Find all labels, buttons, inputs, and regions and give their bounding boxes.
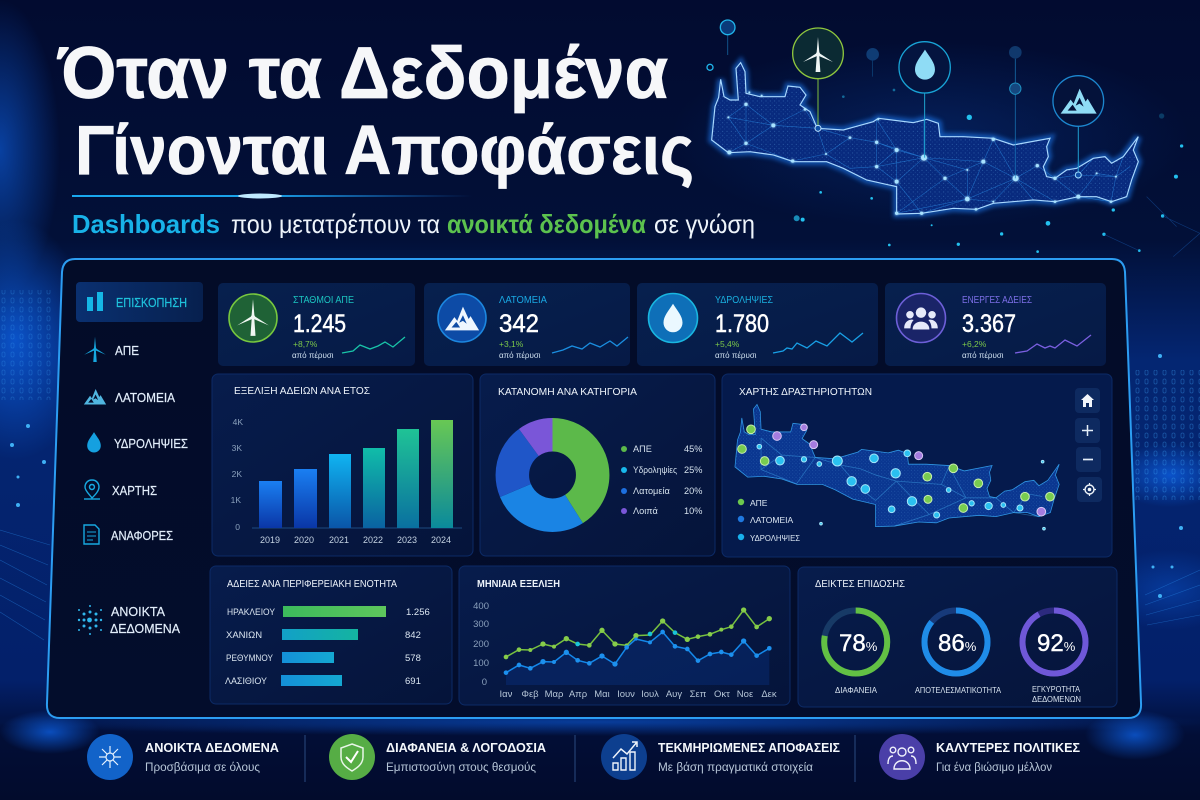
nav: quarries: ΛΑΤΟΜΕΙΑ (115, 391, 176, 405)
mini map of crete (735, 404, 1059, 527)
subtitle: σε γνώση (654, 209, 755, 239)
map legend (738, 498, 800, 543)
open data logo: ΔΕΔΟΜΕΝΑ (110, 621, 180, 636)
KPI card: water abstractions: ΥΔΡΟΛΗΨΙΕΣ (715, 294, 773, 306)
donut chart (512, 435, 593, 515)
donut legend: 45% (684, 444, 702, 454)
panel: activity map (722, 374, 1112, 557)
x axis: 2024 (431, 535, 451, 545)
KPI card: active permits: 3.367 (962, 310, 1016, 338)
map controls (1075, 388, 1102, 502)
benefit: better policies: Για ένα βιώσιμο μέλλον (936, 762, 1052, 774)
y axis: 1K (231, 495, 241, 505)
benefit: open data (87, 734, 279, 780)
gauge: transparency (824, 610, 887, 695)
subtitle: ανοικτά δεδομένα (447, 209, 646, 239)
month labels: Ιουν (617, 689, 635, 700)
map legend: ΛΑΤΟΜΕΙΑ (750, 515, 793, 525)
panel: monthly trend line chart (459, 566, 790, 705)
x axis (260, 535, 451, 545)
panel: performance indicators: ΔΕΙΚΤΕΣ ΕΠΙΔΟΣΗΣ (815, 578, 905, 590)
map markers (738, 424, 1054, 530)
title (57, 33, 694, 189)
horizontal bars: ΛΑΣΙΘΙΟΥ (225, 676, 268, 687)
panel: permits by regional unit (210, 566, 452, 704)
donut legend (621, 444, 702, 516)
horizontal bars (225, 606, 430, 687)
benefit: evidence-based decisions (601, 734, 840, 780)
month labels: Φεβ (521, 689, 539, 700)
KPI card: quarries (424, 283, 630, 366)
gauge: data validity (1022, 610, 1086, 704)
gauge: transparency: 78% (839, 630, 878, 657)
panel: category donut (480, 374, 715, 556)
line series (504, 607, 772, 685)
KPI card: quarries: 342 (499, 310, 539, 338)
month labels: Οκτ (714, 689, 730, 700)
title: Γίνονται Αποφάσεις (75, 111, 694, 189)
panel: permits by regional unit: ΑΔΕΙΕΣ ΑΝΑ ΠΕΡΙΦΕΡΕΙΑΚΗ ΕΝΟΤΗΤΑ (227, 578, 397, 590)
panel: permits by year bar chart: ΕΞΕΛΙΞΗ ΑΔΕΙΩΝ ΑΝΑ ΕΤΟΣ (234, 385, 370, 397)
nav: map (84, 480, 157, 499)
month labels: Δεκ (761, 689, 777, 700)
KPI card: RES stations: ΣΤΑΘΜΟΙ ΑΠΕ (293, 294, 354, 306)
nav: overview active (76, 282, 203, 322)
subtitle (72, 209, 755, 239)
month labels (500, 689, 777, 700)
subtitle: που μετατρέπουν τα (231, 209, 440, 239)
benefit: open data: Προσβάσιμα σε όλους (145, 762, 260, 774)
horizontal bars: 578 (405, 653, 421, 664)
month labels: Απρ (569, 689, 588, 700)
nav: water abstractions: ΥΔΡΟΛΗΨΙΕΣ (114, 437, 188, 451)
bars (259, 420, 453, 528)
crete network map with pins (707, 20, 1200, 257)
gauge: data validity: ΕΓΚΥΡΟΤΗΤΑ (1032, 684, 1080, 694)
x axis: 2022 (363, 535, 383, 545)
x axis: 2023 (397, 535, 417, 545)
KPI card: water abstractions (637, 283, 878, 366)
KPI card: active permits: +6,2% (962, 339, 987, 349)
month labels: Αυγ (666, 689, 682, 700)
nav: res (84, 337, 139, 362)
y axis (231, 417, 243, 532)
x axis: 2019 (260, 535, 280, 545)
horizontal bars: ΡΕΘΥΜΝΟΥ (226, 653, 274, 664)
donut legend: 25% (684, 465, 702, 475)
gauge: effectiveness (915, 610, 1001, 695)
horizontal bars: ΧΑΝΙΩΝ (226, 630, 262, 641)
horizontal bars: 691 (405, 676, 421, 687)
gauge: data validity: ΔΕΔΟΜΕΝΩΝ (1032, 694, 1081, 704)
icon: people (896, 294, 946, 342)
KPI card: quarries: +3,1% (499, 339, 524, 349)
sidebar navigation (76, 282, 203, 636)
KPI card: water abstractions: 1.780 (715, 310, 769, 338)
title: Όταν τα Δεδομένα (57, 33, 668, 114)
month labels: Ιαν (500, 689, 513, 700)
map legend: ΑΠΕ (750, 498, 768, 508)
benefit: better policies: ΚΑΛΥΤΕΡΕΣ ΠΟΛΙΤΙΚΕΣ (936, 741, 1080, 755)
nav: reports: ΑΝΑΦΟΡΕΣ (111, 529, 173, 543)
KPI card: RES stations: από πέρυσι (292, 351, 334, 360)
month labels: Σεπ (690, 689, 707, 700)
pin: water drop (899, 42, 950, 158)
benefit: transparency: Εμπιστοσύνη στους θεσμούς (386, 762, 536, 774)
KPI card: active permits (885, 283, 1106, 366)
nav: reports (84, 525, 173, 544)
map legend: ΥΔΡΟΛΗΨΙΕΣ (750, 533, 800, 543)
axis labels: 200 (473, 639, 489, 650)
KPI card: quarries: ΛΑΤΟΜΕΙΑ (499, 294, 547, 306)
nav: overview active: ΕΠΙΣΚΟΠΗΣΗ (116, 296, 187, 310)
dashboard frame (47, 259, 1141, 718)
y axis: 0 (235, 522, 240, 532)
KPI card: active permits: από πέρυσι (962, 351, 1004, 360)
donut legend: Λατομεία (633, 486, 670, 496)
x axis: 2021 (329, 535, 349, 545)
KPI card: RES stations (218, 283, 415, 366)
gauge: effectiveness: ΑΠΟΤΕΛΕΣΜΑΤΙΚΟΤΗΤΑ (915, 685, 1001, 695)
donut legend: ΑΠΕ (633, 444, 652, 454)
donut legend: 10% (684, 506, 702, 516)
axis labels (473, 601, 489, 688)
KPI card: water abstractions: από πέρυσι (715, 351, 757, 360)
pin: mountain (1053, 76, 1104, 178)
y axis: 4K (233, 417, 243, 427)
y axis: 2K (232, 469, 242, 479)
nav: map: ΧΑΡΤΗΣ (112, 484, 157, 498)
month labels: Νοε (737, 689, 754, 700)
y axis: 3K (232, 443, 242, 453)
month labels: Μαι (594, 689, 610, 700)
panel: category donut: ΚΑΤΑΝΟΜΗ ΑΝΑ ΚΑΤΗΓΟΡΙΑ (498, 386, 637, 398)
donut legend: Λοιπά (633, 506, 658, 516)
benefit: evidence-based decisions: ΤΕΚΜΗΡΙΩΜΕΝΕΣ ΑΠΟΦΑΣΕΙΣ (658, 741, 840, 755)
open data logo: ΑΝΟΙΚΤΑ (111, 604, 165, 619)
panel: activity map: ΧΑΡΤΗΣ ΔΡΑΣΤΗΡΙΟΤΗΤΩΝ (739, 386, 872, 398)
axis labels: 0 (482, 677, 487, 688)
KPI card: active permits: ΕΝΕΡΓΕΣ ΑΔΕΙΕΣ (962, 294, 1032, 306)
horizontal bars: 1.256 (406, 607, 430, 618)
benefit: transparency (329, 734, 546, 780)
icon: turbine (229, 294, 277, 342)
icon: water drop (648, 294, 698, 342)
KPI card: RES stations: +8,7% (293, 339, 318, 349)
KPI card: water abstractions: +5,4% (715, 339, 740, 349)
gauge: effectiveness: 86% (938, 630, 977, 657)
icon: mountain (438, 294, 486, 342)
benefit: transparency: ΔΙΑΦΑΝΕΙΑ & ΛΟΓΟΔΟΣΙΑ (386, 741, 546, 755)
benefit: open data: ΑΝΟΙΚΤΑ ΔΕΔΟΜΕΝΑ (145, 741, 279, 755)
panel: monthly trend line chart: ΜΗΝΙΑΙΑ ΕΞΕΛΙΞΗ (477, 578, 560, 590)
benefit: evidence-based decisions: Με βάση πραγματικά στοιχεία (658, 762, 813, 774)
footer band (87, 734, 1080, 782)
panel: performance indicators (798, 567, 1117, 707)
benefit: better policies (879, 734, 1080, 780)
pin: wind turbine (793, 28, 843, 131)
KPI card: quarries: από πέρυσι (499, 351, 541, 360)
donut legend: Υδροληψίες (633, 465, 678, 475)
KPI card: RES stations: 1.245 (293, 310, 346, 338)
horizontal bars: ΗΡΑΚΛΕΙΟΥ (227, 607, 276, 618)
axis labels: 400 (473, 601, 489, 612)
panel: permits by year bar chart (212, 374, 473, 556)
x axis: 2020 (294, 535, 314, 545)
donut legend: 20% (684, 486, 702, 496)
small pins (707, 20, 1022, 178)
axis labels: 300 (473, 619, 489, 630)
month labels: Μαρ (545, 689, 564, 700)
open data logo (78, 604, 180, 636)
horizontal bars: 842 (405, 630, 421, 641)
title divider (72, 194, 472, 198)
nav: quarries (84, 389, 176, 405)
subtitle: Dashboards (72, 209, 220, 239)
axis labels: 100 (473, 658, 489, 669)
gauge: transparency: ΔΙΑΦΑΝΕΙΑ (835, 685, 877, 695)
gauge: data validity: 92% (1037, 630, 1076, 657)
nav: water abstractions (87, 432, 188, 453)
month labels: Ιουλ (641, 689, 659, 700)
nav: res: ΑΠΕ (115, 344, 139, 358)
